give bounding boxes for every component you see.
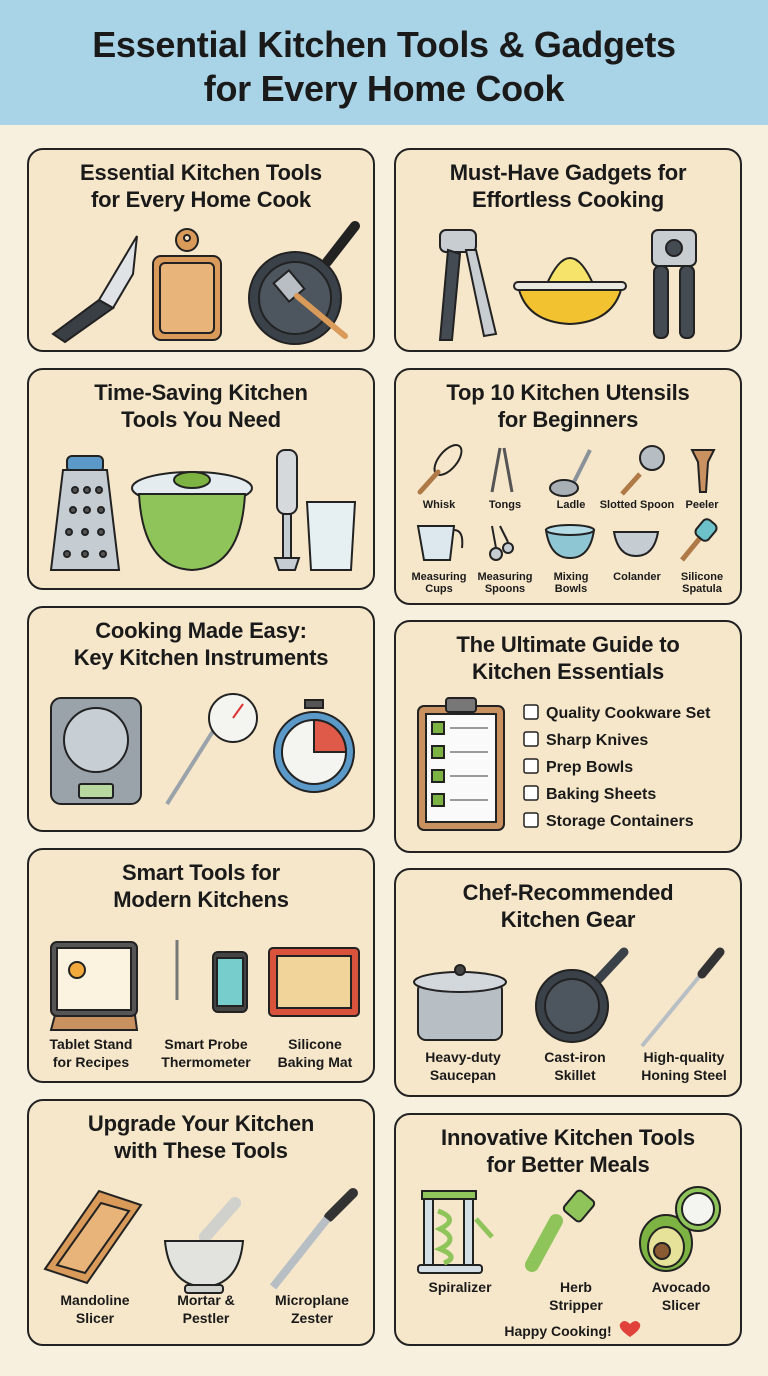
icon: microplane [273,1193,353,1287]
label: row 2 [411,571,723,595]
heading: Kitchen Essentials [472,659,664,684]
panel: ultimate guide [394,620,742,853]
heading [450,160,686,212]
label: row 2: Mixing [554,571,588,583]
checklist: Sharp Knives [546,732,648,749]
label: row 2: Spoons [485,583,525,595]
labels: Tablet Stand [50,1036,132,1052]
icon: avocado slicer [640,1187,720,1271]
footer: happy cooking: Happy Cooking! [504,1323,612,1339]
label: row 1: Tongs [489,499,521,511]
heading: Tools You Need [121,407,281,432]
label: row 2: Measuring [411,571,467,583]
label: row 1 [423,499,719,511]
labels: Smart Probe [164,1036,248,1052]
icon: immersion blender [275,450,299,570]
label: row 1: Peeler [685,499,719,511]
heading: Cooking Made Easy: [95,618,307,643]
labels: Skillet [554,1067,596,1083]
panel: cooking made easy [27,606,375,832]
heading [88,1111,314,1163]
labels: Slicer [76,1310,115,1326]
panel: upgrade [27,1099,375,1346]
heading: for Beginners [498,407,638,432]
heading: The Ultimate Guide to [456,632,680,657]
heading: Modern Kitchens [113,887,289,912]
labels: Heavy-duty [425,1049,501,1065]
labels: Spiralizer [428,1279,492,1295]
labels: Mortar & [177,1292,235,1308]
labels: Mandoline [60,1292,130,1308]
icon: slotted spoon [622,446,664,494]
heading: with These Tools [114,1138,288,1163]
labels: Stripper [549,1297,603,1313]
panel: essential tools [27,148,375,352]
labels: Silicone [288,1036,342,1052]
panel: gadgets [394,148,742,352]
heading: for Better Meals [486,1152,650,1177]
heading: Innovative Kitchen Tools [441,1125,695,1150]
icon: garlic press [440,230,496,340]
labels: Cast-iron [544,1049,606,1065]
heading: for Every Home Cook [91,187,311,212]
icon: cast-iron skillet [536,952,624,1042]
label: row 1: Ladle [557,499,585,511]
labels: Avocado [652,1279,710,1295]
heading: Effortless Cooking [472,187,664,212]
icon: smart probe [177,940,247,1012]
label: row 2: Cups [425,583,453,595]
heading: Kitchen Gear [501,907,635,932]
panel: time-saving [27,368,375,590]
checklist: Baking Sheets [546,786,656,803]
labels: Slicer [662,1297,701,1313]
icon: thermometer [167,694,257,804]
checklist: Storage Containers [546,813,694,830]
labels: Saucepan [430,1067,496,1083]
label: row 2: Spatula [682,583,723,595]
labels [50,1036,353,1070]
icon: herb stripper [532,1189,596,1265]
icon: mortar and pestle [165,1203,243,1293]
icon: skillet [249,226,355,344]
heading [446,380,690,432]
heading [94,380,308,432]
heading [456,632,680,684]
icon: ladle [550,450,590,496]
heading [74,618,328,670]
icon: grater [51,456,119,570]
icon: saucepan [414,965,506,1040]
icon: measuring cup [307,502,355,570]
panel: top 10 utensils [394,368,742,605]
checklist: Prep Bowls [546,759,633,776]
label: row 2: Colander [613,571,662,583]
checklist [524,705,711,830]
labels: Herb [560,1279,592,1295]
icon: salad spinner [132,472,252,570]
labels: for Recipes [53,1054,129,1070]
icon: tongs [492,448,512,492]
label: row 2: Silicone [681,571,723,583]
icon: timer [274,700,354,792]
heading: Upgrade Your Kitchen [88,1111,314,1136]
checklist: Quality Cookware Set [546,705,711,722]
icon: clipboard [418,698,504,830]
icon: cutting board [153,229,221,340]
icon: mixing bowl [546,525,594,558]
label: row 2: Measuring [477,571,533,583]
heading [441,1125,695,1177]
labels: Baking Mat [278,1054,353,1070]
panel: smart tools [27,848,375,1083]
title [92,24,676,109]
heading: Key Kitchen Instruments [74,645,328,670]
icon: kitchen scale [51,698,141,804]
labels: Thermometer [161,1054,251,1070]
heading [80,160,322,212]
heading: Essential Kitchen Tools [80,160,322,185]
heading: Must-Have Gadgets for [450,160,686,185]
icon: colander [614,532,658,556]
panel: innovative [394,1113,742,1346]
header [0,0,768,125]
labels [425,1049,727,1083]
icon: spiralizer [418,1191,492,1273]
labels: Honing Steel [641,1067,727,1083]
labels [428,1279,710,1313]
icon: honing steel [642,952,720,1046]
heading [463,880,673,932]
label: row 2: Bowls [555,583,587,595]
labels: Zester [291,1310,334,1326]
icon: measuring cups [418,526,462,560]
icon: can opener [652,230,696,338]
icon: mandoline [45,1191,141,1283]
title: for Every Home Cook [204,68,564,109]
icon: measuring spoons [490,526,513,560]
icon: tablet stand [51,942,137,1030]
labels: High-quality [644,1049,725,1065]
label: row 1: Whisk [423,499,456,511]
title: Essential Kitchen Tools & Gadgets [92,24,676,65]
icon: whisk [420,440,466,492]
icon: knife [53,236,137,342]
heading: Time-Saving Kitchen [94,380,308,405]
labels: Microplane [275,1292,349,1308]
panel: chef-recommended [394,868,742,1097]
icon: silicone spatula [682,517,719,560]
label: row 1: Slotted Spoon [600,499,675,511]
labels: Pestler [183,1310,230,1326]
labels [60,1292,349,1326]
heading [113,860,289,912]
heading: Smart Tools for [122,860,280,885]
heading: Chef-Recommended [463,880,673,905]
icon: citrus juicer [514,258,626,324]
icon: peeler [692,450,714,492]
icon: baking mat [269,948,359,1016]
heading: Top 10 Kitchen Utensils [446,380,690,405]
